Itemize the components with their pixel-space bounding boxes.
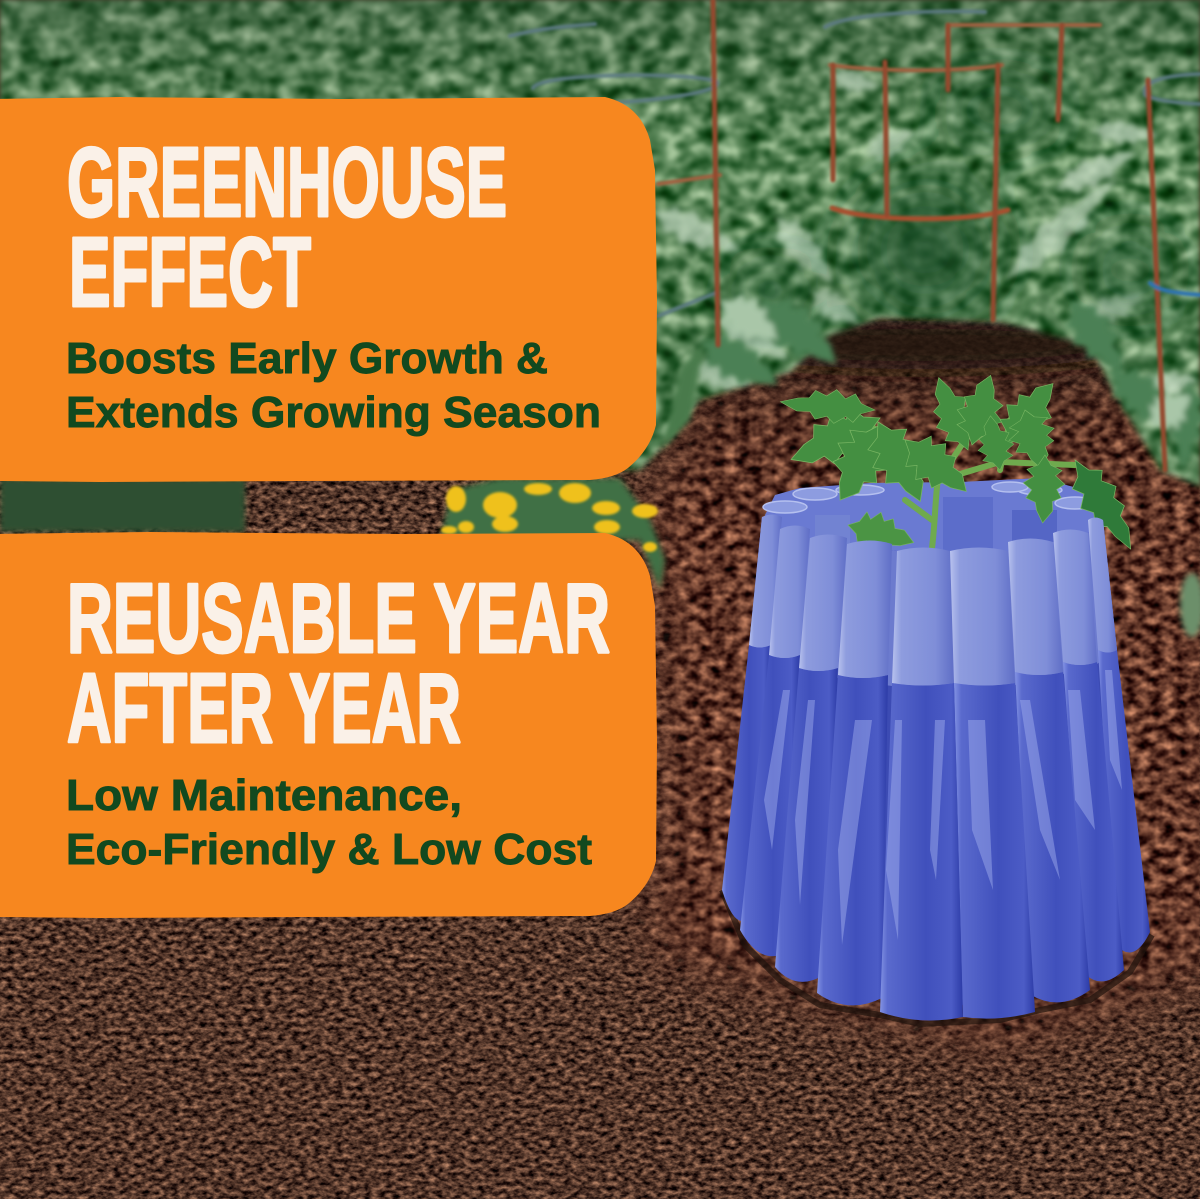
panel: reusable year after year [0, 532, 657, 918]
subheading: growth benefit: Extends Growing Season [66, 388, 601, 437]
panel: greenhouse effect [0, 97, 657, 482]
background: foliage overlapping the soil edge [662, 280, 1200, 471]
heading: reusable year after year: REUSABLE YEAR [67, 563, 610, 673]
subheading: maintenance benefit [66, 771, 592, 874]
subheading: growth benefit [66, 334, 601, 437]
heading: reusable year after year: AFTER YEAR [67, 653, 461, 763]
subheading: maintenance benefit: Low Maintenance, [66, 771, 462, 820]
tomato seedling [779, 369, 1148, 563]
heading: greenhouse effect: EFFECT [69, 217, 311, 327]
shadow under protector [722, 890, 1152, 1024]
background: mulch soil [0, 310, 1200, 1199]
background: shrub behind panels [0, 478, 1200, 637]
heading: greenhouse effect: GREENHOUSE [67, 127, 507, 237]
back rim tubes [763, 478, 1103, 560]
heading: reusable year after year [67, 563, 610, 763]
heading: greenhouse effect [67, 127, 507, 327]
yellow flowers [441, 483, 658, 552]
background: blurred tomato garden foliage [0, 0, 1200, 490]
flute highlights [764, 670, 1122, 945]
protector body silhouette [745, 517, 1130, 1005]
subheading: growth benefit: Boosts Early Growth & [66, 334, 548, 383]
tomato cages [510, 0, 1200, 470]
flutes: lower tinted band [722, 645, 1150, 1021]
subheading: maintenance benefit: Eco-Friendly & Low Cost [66, 825, 592, 874]
flutes: upper clear band [749, 514, 1117, 686]
product: blue plant protector [722, 369, 1152, 1024]
